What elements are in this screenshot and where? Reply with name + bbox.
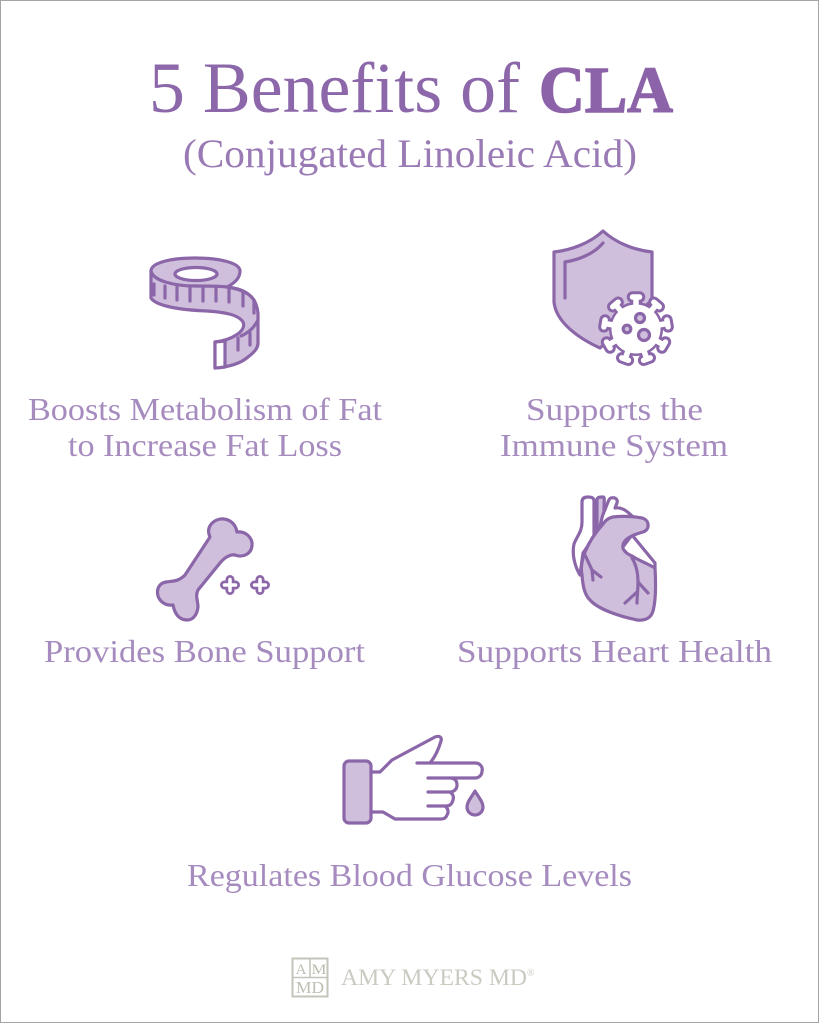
icon: measuring tape xyxy=(151,258,258,368)
title: 5 Benefits of xyxy=(149,48,520,128)
icon: bone with plus signs xyxy=(157,519,266,620)
label: fat loss xyxy=(28,391,382,463)
icon: heart xyxy=(573,497,656,620)
blood drop xyxy=(467,791,483,815)
label: fat loss: Boosts Metabolism of Fat xyxy=(28,391,382,427)
subtitle: (Conjugated Linoleic Acid) xyxy=(183,131,637,176)
plus signs xyxy=(224,580,266,590)
logo wordmark: AMY MYERS MD xyxy=(341,965,527,990)
logo mark: MD xyxy=(296,978,324,997)
logo mark: A xyxy=(296,962,307,978)
label: blood glucose: Regulates Blood Glucose Levels xyxy=(187,857,632,893)
logo: Amy Myers MD: ® xyxy=(527,968,535,979)
label: immune system: Immune System xyxy=(500,427,728,463)
logo: Amy Myers MD xyxy=(292,958,535,997)
icon: hand with blood drop xyxy=(344,736,483,823)
logo mark xyxy=(292,958,328,997)
label: fat loss: to Increase Fat Loss xyxy=(68,427,342,463)
label: bone support: Provides Bone Support xyxy=(44,633,365,669)
logo mark: M xyxy=(312,962,326,978)
virus xyxy=(604,297,668,360)
label: heart health: Supports Heart Health xyxy=(457,633,772,669)
title: CLA xyxy=(539,54,673,127)
icon: shield with virus xyxy=(554,231,668,360)
label: immune system: Supports the xyxy=(526,391,703,427)
label: immune system xyxy=(500,391,728,463)
